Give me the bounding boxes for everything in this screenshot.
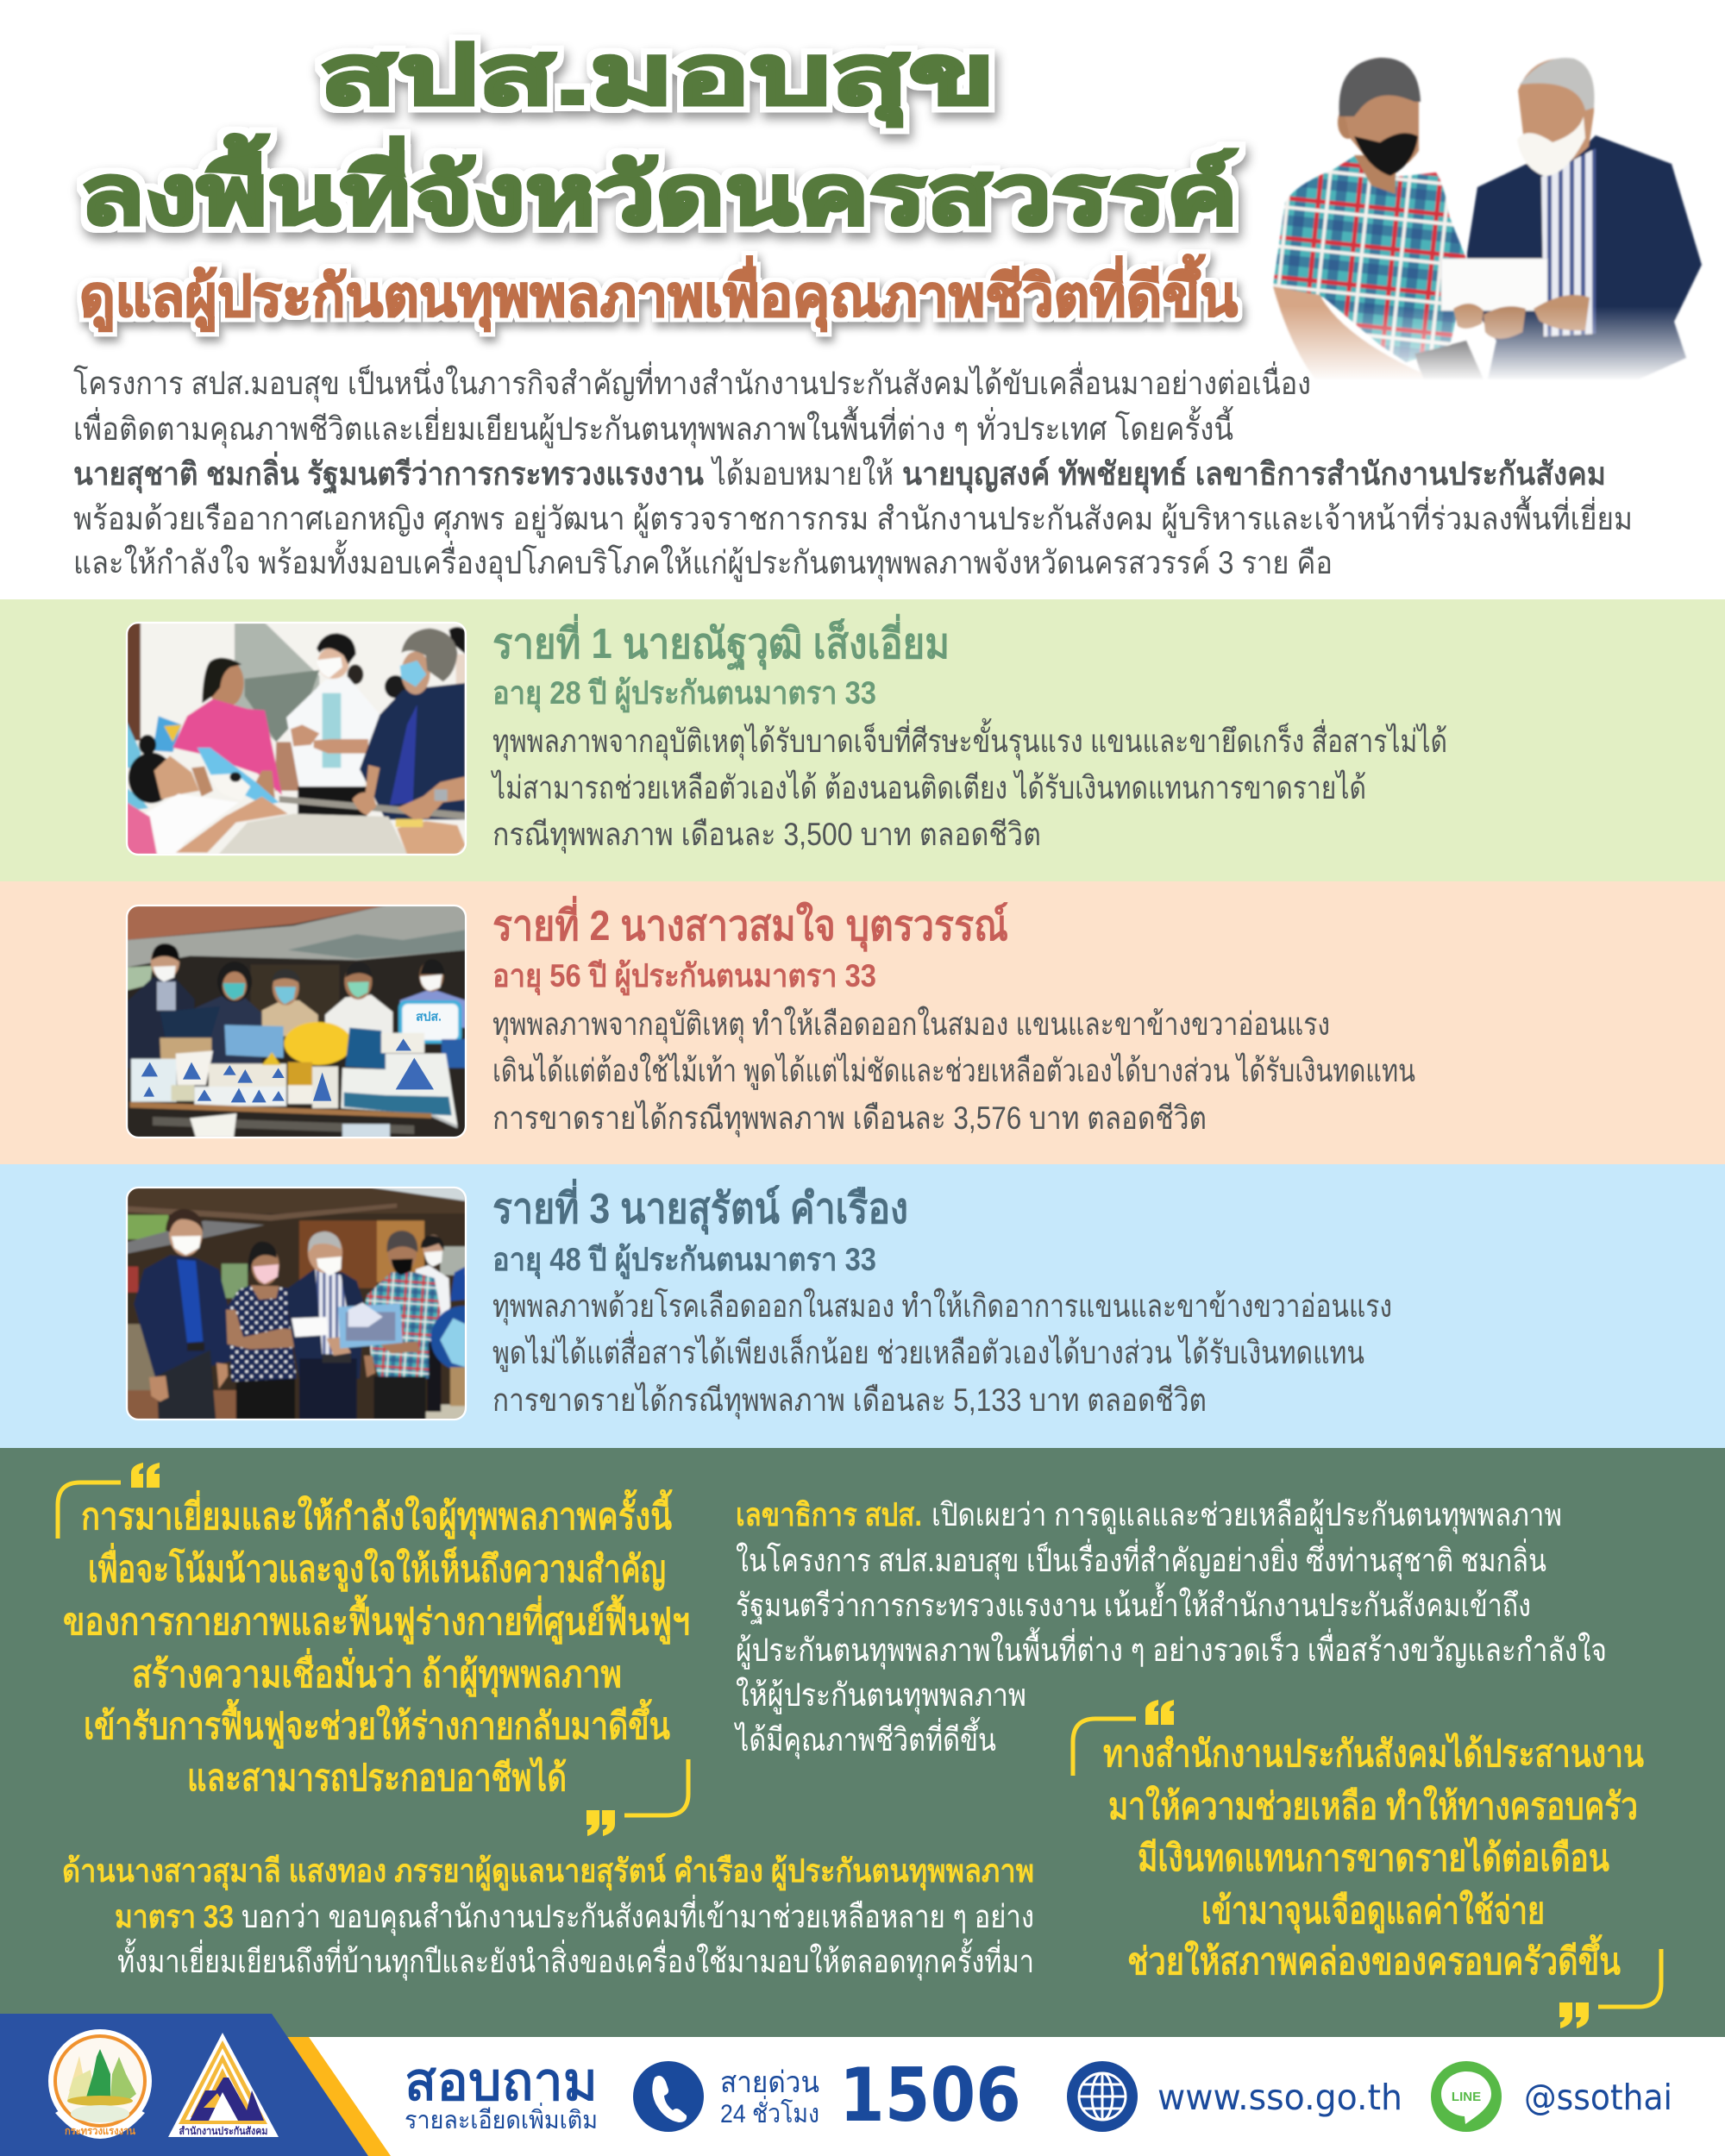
- quote 1 text: ของการกายภาพและฟื้นฟูร่างกายที่ศูนย์ฟื้นฟูฯ: [63, 1594, 690, 1645]
- icon: LINE: LINE: [1452, 2090, 1481, 2104]
- secretary-general statement: ในโครงการ สปส.มอบสุข เป็นเรื่องที่สำคัญอย่างยิ่ง ซึ่งท่านสุชาติ ชมกลิ่น: [736, 1538, 1546, 1580]
- hotline label: สายด่วน: [720, 2066, 819, 2099]
- photo: case 2: [127, 901, 472, 1143]
- quote 1 text: การมาเยี่ยมและให้กำลังใจผู้ทุพพลภาพครั้งนี้: [81, 1489, 673, 1540]
- right man head: [1518, 59, 1594, 170]
- quote 2 closing bracket: [1559, 1949, 1661, 2028]
- quote 1: [58, 1463, 690, 1836]
- hotline number: 1506: [839, 2053, 1021, 2139]
- quote 1 text: เพื่อจะโน้มน้าวและจูงใจให้เห็นถึงความสำคัญ: [88, 1543, 666, 1592]
- quote 1 text: [63, 1489, 690, 1799]
- title block: [79, 29, 1238, 332]
- panel: case 3: [0, 1164, 1725, 1448]
- case 1 description: กรณีทุพพลภาพ เดือนละ 3,500 บาท ตลอดชีวิต: [492, 817, 1041, 854]
- panel: case 1: [0, 599, 1725, 881]
- intro paragraph: ได้มอบหมายให้: [710, 455, 894, 492]
- secretary-general statement: เปิดเผยว่า การดูแลและช่วยเหลือผู้ประกันตนทุพพลภาพ: [932, 1497, 1562, 1534]
- secretary-general statement: เลขาธิการ สปส.: [736, 1497, 922, 1532]
- footer yellow slant: [287, 2037, 391, 2156]
- panel: green quotes section: [0, 1448, 1725, 2037]
- intro paragraph: นายบุญสงค์ ทัพชัยยุทธ์ เลขาธิการสำนักงานประกันสังคม: [902, 456, 1606, 494]
- quote 2 text: มีเงินทดแทนการขาดรายได้ต่อเดือน: [1138, 1836, 1609, 1879]
- hotline label: 24 ชั่วโมง: [720, 2096, 819, 2128]
- case 3 age: อายุ 48 ปี ผู้ประกันตนมาตรา 33: [492, 1242, 876, 1280]
- logo: social security office: สำนักงานประกันสังคม: [179, 2125, 267, 2137]
- case 3 heading: รายที่ 3 นายสุรัตน์ คำเรือง: [492, 1178, 908, 1235]
- quote 2 text: [1103, 1732, 1644, 1983]
- right man jacket: [1466, 135, 1702, 379]
- quote 2 text: ช่วยให้สภาพคล่องของครอบครัวดีขึ้น: [1127, 1934, 1621, 1983]
- quote 2 opening bracket: [1073, 1700, 1174, 1776]
- title line 1: สปส.มอบสุข: [319, 29, 995, 127]
- left man shirt: [1273, 155, 1466, 362]
- footer blue panel: [0, 2014, 368, 2156]
- wife statement: ทั้งมาเยี่ยมเยียนถึงที่บ้านทุกปีและยังนำสิ่งของเครื่องใช้มามอบให้ตลอดทุกครั้งที่มา: [117, 1938, 1034, 1981]
- secretary-general statement: ได้มีคุณภาพชีวิตที่ดีขึ้น: [734, 1716, 996, 1759]
- quote 1 closing bracket: [586, 1759, 688, 1836]
- case 1 description: ไม่สามารถช่วยเหลือตัวเองได้ ต้องนอนติดเตียง ได้รับเงินทดแทนการขาดรายได้: [491, 769, 1366, 805]
- hands: [1453, 304, 1484, 329]
- wife statement: [62, 1853, 1034, 1981]
- line handle: @ssothai: [1524, 2077, 1672, 2118]
- logos on goods: [141, 1038, 434, 1102]
- left man head: [1338, 106, 1358, 139]
- case 2 description: การขาดรายได้กรณีทุพพลภาพ เดือนละ 3,576 บาท ตลอดชีวิต: [492, 1100, 1207, 1138]
- panel: case 2: [0, 881, 1725, 1164]
- contact label: สอบถาม: [405, 2053, 598, 2112]
- photo: case 3: [126, 1187, 467, 1421]
- case 2 heading: รายที่ 2 นางสาวสมใจ บุตรวรรณ์: [492, 895, 1008, 952]
- case 1 heading: รายที่ 1 นายณัฐวุฒิ เส็งเอี่ยม: [492, 613, 950, 671]
- quote 2: [1073, 1700, 1661, 2028]
- subtitle: ดูแลผู้ประกันตนทุพพลภาพเพื่อคุณภาพชีวิตที่ดีขึ้น: [79, 254, 1238, 332]
- case 2 description: [492, 1006, 1415, 1138]
- quote 1 opening bracket: [58, 1463, 160, 1539]
- case 3 description: [492, 1288, 1392, 1420]
- quote 1 text: เข้ารับการฟื้นฟูจะช่วยให้ร่างกายกลับมาดีขึ้น: [84, 1698, 671, 1749]
- wife statement: ด้านนางสาวสุมาลี แสงทอง ภรรยาผู้ดูแลนายสุรัตน์ คำเรือง ผู้ประกันตนทุพพลภาพ: [62, 1853, 1034, 1891]
- icon: globe: [1067, 2061, 1138, 2132]
- photo: case 1: [127, 618, 472, 860]
- logo: social security office: [168, 2033, 279, 2137]
- secretary-general statement: รัฐมนตรีว่าการกระทรวงแรงงาน เน้นย้ำให้สำนักงานประกันสังคมเข้าถึง: [736, 1582, 1531, 1625]
- contact label: รายละเอียดเพิ่มเติม: [405, 2103, 598, 2134]
- wife statement: มาตรา 33: [115, 1899, 234, 1934]
- case 2 description: เดินได้แต่ต้องใช้ไม้เท้า พูดได้แต่ไม่ชัดและช่วยเหลือตัวเองได้บางส่วน ได้รับเงินทดแทน: [492, 1052, 1415, 1090]
- intro paragraph: เพื่อติดตามคุณภาพชีวิตและเยี่ยมเยียนผู้ประกันตนทุพพลภาพในพื้นที่ต่าง ๆ ทั่วประเทศ โดยครั้งนี้: [73, 405, 1234, 448]
- case 1 description: [491, 718, 1447, 854]
- envelope: [1441, 259, 1547, 310]
- icon: phone: [633, 2061, 704, 2132]
- wife statement: บอกว่า ขอบคุณสำนักงานประกันสังคมที่เข้ามาช่วยเหลือหลาย ๆ อย่าง: [242, 1894, 1034, 1936]
- logo: ministry of labour: [48, 2029, 152, 2139]
- case 1 age: อายุ 28 ปี ผู้ประกันตนมาตรา 33: [492, 675, 876, 713]
- icon: LINE: [1431, 2061, 1502, 2132]
- hero photo: two men with envelope: [1272, 58, 1703, 382]
- intro paragraph: และให้กำลังใจ พร้อมทั้งมอบเครื่องอุปโภคบริโภคให้แก่ผู้ประกันตนทุพพลภาพจังหวัดนครสวรรค์ 3 ราย คือ: [73, 539, 1333, 582]
- secretary-general statement: ให้ผู้ประกันตนทุพพลภาพ: [736, 1677, 1026, 1714]
- hotline label: [720, 2066, 819, 2128]
- case 3 description: ทุพพลภาพด้วยโรคเลือดออกในสมอง ทำให้เกิดอาการแขนและขาข้างขวาอ่อนแรง: [492, 1288, 1392, 1326]
- case 2 description: ทุพพลภาพจากอุบัติเหตุ ทำให้เลือดออกในสมอง แขนและขาข้างขวาอ่อนแรง: [492, 1006, 1330, 1044]
- quote 1 text: สร้างความเชื่อมั่นว่า ถ้าผู้ทุพพลภาพ: [132, 1648, 622, 1698]
- logo: ministry of labour: กระทรวงแรงงาน: [65, 2125, 136, 2137]
- sign text: case 2: สปส.: [416, 1009, 442, 1023]
- website: www.sso.go.th: [1157, 2077, 1402, 2118]
- intro paragraph: นายสุชาติ ชมกลิ่น รัฐมนตรีว่าการกระทรวงแรงงาน: [73, 451, 704, 494]
- case 1 description: ทุพพลภาพจากอุบัติเหตุได้รับบาดเจ็บที่ศีรษะขั้นรุนแรง แขนและขายึดเกร็ง สื่อสารไม่ได้: [492, 718, 1447, 761]
- secretary-general statement: [734, 1497, 1607, 1759]
- case 2 age: อายุ 56 ปี ผู้ประกันตนมาตรา 33: [492, 958, 876, 996]
- title line 2: ลงพื้นที่จังหวัดนครสวรรค์: [79, 134, 1238, 241]
- case 3 description: การขาดรายได้กรณีทุพพลภาพ เดือนละ 5,133 บาท ตลอดชีวิต: [492, 1382, 1207, 1420]
- footer: [0, 2014, 1725, 2156]
- case 3 description: พูดไม่ได้แต่สื่อสารได้เพียงเล็กน้อย ช่วยเหลือตัวเองได้บางส่วน ได้รับเงินทดแทน: [492, 1330, 1364, 1372]
- quote 2 text: เข้ามาจุนเจือดูแลค่าใช้จ่าย: [1201, 1889, 1545, 1934]
- intro paragraph: โครงการ สปส.มอบสุข เป็นหนึ่งในภารกิจสำคัญที่ทางสำนักงานประกันสังคมได้ขับเคลื่อนมาอย่างต่อเนื่อง: [73, 360, 1311, 403]
- intro paragraph: [73, 360, 1633, 582]
- quote 1 text: และสามารถประกอบอาชีพได้: [187, 1756, 567, 1799]
